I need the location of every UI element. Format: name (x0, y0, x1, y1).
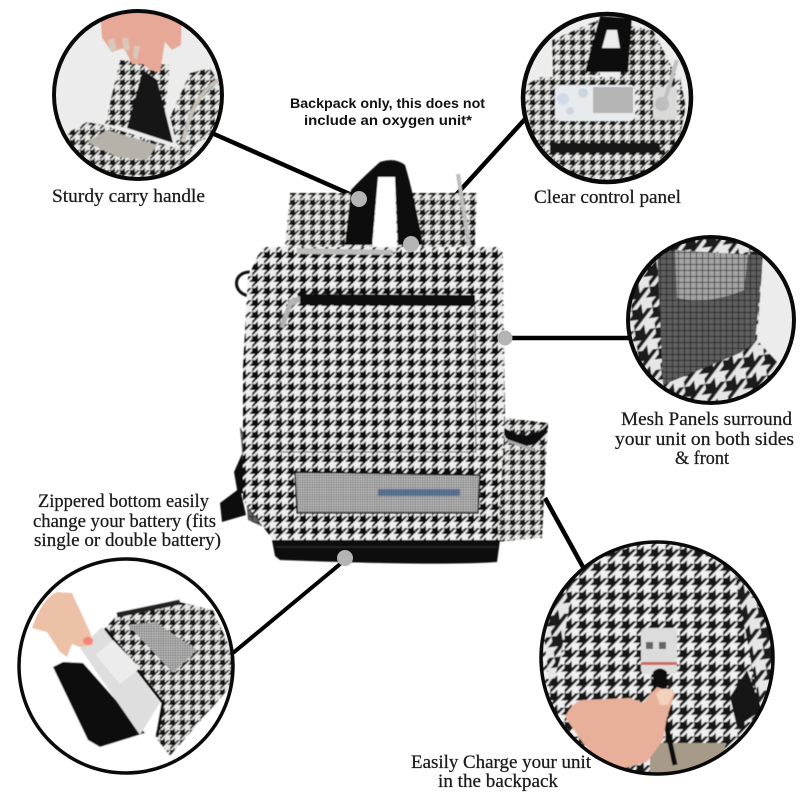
tube port (653, 87, 677, 120)
label: zippered bottom (33, 492, 221, 551)
label: zippered bottom: single or double battery) (34, 531, 221, 551)
backpack illustration (220, 160, 548, 564)
carry handle (345, 160, 423, 245)
open black case (53, 662, 145, 747)
cable (664, 715, 675, 765)
circle photo: charging port (538, 540, 778, 780)
callout dot: bottom (337, 550, 353, 566)
rear flap (105, 60, 170, 135)
hand (32, 592, 93, 657)
front pocket seam (280, 306, 476, 452)
hand (100, 12, 182, 72)
left shoulder strap and loop (220, 272, 250, 522)
hand (565, 687, 675, 772)
circle photo: battery (18, 558, 236, 776)
top flap (285, 193, 477, 247)
circle photo: mesh panel (625, 235, 800, 405)
label: mesh panels: Mesh Panels surround (621, 410, 793, 430)
flaps (552, 20, 600, 78)
handle (585, 16, 632, 72)
thumb nail (656, 688, 674, 705)
label: charging (411, 753, 592, 792)
note: backpack only: Backpack only, this does not (290, 95, 485, 111)
blurred side fabric (544, 578, 576, 688)
label: mesh panels (615, 410, 794, 469)
charging label (641, 628, 677, 674)
connector line: zippered bottom (233, 560, 345, 653)
label: mesh panels: & front (675, 449, 730, 469)
plug (653, 668, 667, 692)
zippered bottom (272, 540, 500, 564)
label: zippered bottom: change your battery (fits (33, 512, 216, 532)
callout dot: mesh (498, 330, 512, 346)
callout dot: control panel (403, 236, 419, 252)
black strap (730, 670, 762, 727)
body with control window (67, 122, 198, 177)
nail (83, 637, 93, 645)
zipper pull (279, 296, 300, 328)
front pocket zipper (297, 294, 475, 306)
body (520, 77, 686, 185)
zipper (550, 143, 660, 153)
main body (243, 247, 505, 540)
lighter upper mesh (675, 250, 748, 300)
label: zippered bottom: Zippered bottom easily (38, 492, 210, 512)
circle photo: clear control panel (520, 10, 695, 185)
left mesh pocket (240, 427, 270, 530)
gap under handle (372, 177, 397, 247)
mesh (657, 250, 763, 385)
note: backpack only (290, 95, 485, 128)
side pocket (495, 417, 548, 542)
label: control panel: Clear control panel (534, 188, 681, 208)
circle photo: carry handle (50, 8, 230, 185)
label: charging: in the backpack (438, 772, 559, 792)
connector line: mesh panels (507, 336, 630, 340)
note: backpack only: include an oxygen unit* (304, 112, 473, 128)
connector line: carry handle (214, 134, 352, 195)
label: charging: Easily Charge your unit (411, 753, 592, 773)
battery (80, 627, 160, 735)
mesh window (295, 472, 480, 513)
right flap (170, 68, 222, 150)
light background (756, 257, 792, 362)
bag (105, 602, 236, 756)
lower area (650, 743, 725, 773)
top clear window edge (297, 248, 393, 255)
connector line: control panel (415, 118, 526, 240)
callout dot: handle (351, 191, 367, 207)
connector line: charging (545, 498, 583, 567)
label: carry handle: Sturdy carry handle (52, 187, 205, 207)
label: mesh panels: your unit on both sides (615, 430, 794, 450)
side pocket zipper (505, 423, 548, 446)
strap (127, 70, 173, 143)
device screen panel (555, 85, 635, 121)
device logo behind mesh (378, 489, 460, 496)
oxygen tube (458, 174, 469, 246)
